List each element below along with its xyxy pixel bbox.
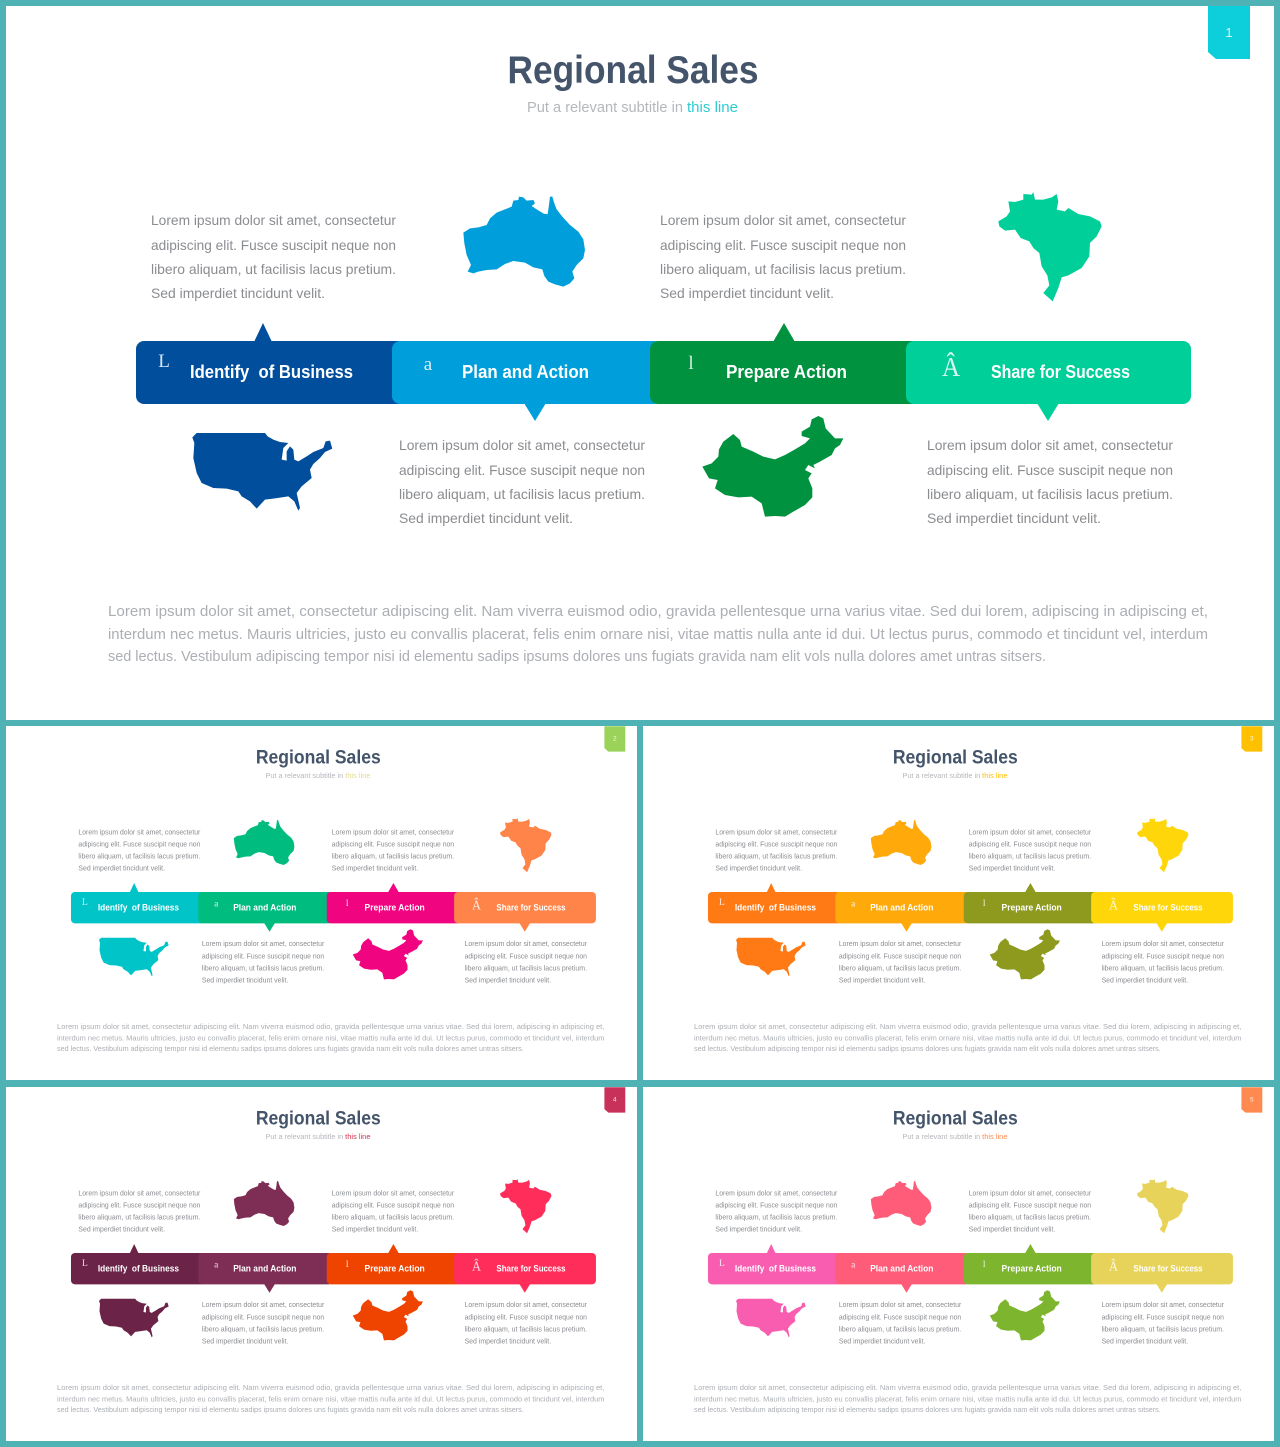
page tab 5 — [1241, 1087, 1262, 1113]
text block: bottom centre-left: libero aliquam, ut facilisis lacus pretium. — [202, 966, 324, 973]
text block: top centre: adipiscing elit. Fusce suscipit neque non — [660, 237, 906, 253]
text block: top left: Lorem ipsum dolor sit amet, consectetur — [78, 1190, 201, 1197]
text block: bottom right: Lorem ipsum dolor sit amet, consectetur — [465, 1302, 588, 1309]
text block: bottom right: adipiscing elit. Fusce suscipit neque non — [1102, 954, 1224, 961]
text block: top left — [715, 829, 838, 873]
map: China — [353, 929, 423, 979]
text block: bottom centre-left: Sed imperdiet tincidunt velit. — [839, 1339, 925, 1346]
step 2: Plan and Action: Plan and Action — [462, 361, 589, 382]
step 4: Share for Success: Â — [942, 352, 960, 382]
page tab 2: 2 — [613, 736, 617, 743]
step 3: Prepare Action: l — [346, 899, 349, 909]
step 4: Share for Success: Share for Success — [1133, 1263, 1203, 1273]
text block: top centre: adipiscing elit. Fusce suscipit neque non — [969, 842, 1091, 849]
paragraph: interdum nec metus. Mauris ultricies, justo eu convallis placerat, felis enim ornare nisi, vitae mattis nulla ante id dui. Ut lectus purus, commodo et tincidunt vel, interdum — [57, 1394, 604, 1403]
text block: bottom centre-left: Sed imperdiet tincidunt velit. — [839, 978, 925, 985]
step bar — [136, 323, 1191, 421]
text block: bottom right — [1102, 941, 1225, 985]
text block: bottom centre-left: adipiscing elit. Fusce suscipit neque non — [839, 1315, 961, 1322]
step 1: Identify of Business — [708, 883, 842, 923]
text block: top left: libero aliquam, ut facilisis lacus pretium. — [151, 261, 396, 277]
step 4: Share for Success: Share for Success — [496, 1263, 566, 1273]
step 3: Prepare Action — [650, 323, 920, 404]
text block: top centre — [332, 829, 455, 873]
text block: top left: Sed imperdiet tincidunt velit. — [151, 285, 325, 301]
paragraph: sed lectus. Vestibulum adipiscing tempor nisi id elementu sadips ipsums dolores uns fugiats gravida nam elit vols nulla dolores amet untras sitsers. — [57, 1405, 524, 1414]
text block: top centre: Lorem ipsum dolor sit amet, consectetur — [332, 829, 455, 836]
step 1: Identify of Business — [71, 883, 205, 923]
page tab 4 — [604, 1087, 625, 1113]
step 2: Plan and Action — [392, 341, 662, 421]
text block: bottom right: libero aliquam, ut facilisis lacus pretium. — [927, 486, 1173, 502]
step 2: Plan and Action: Plan and Action — [870, 902, 934, 912]
text block: top left — [78, 829, 201, 873]
text block: top left: Sed imperdiet tincidunt velit. — [78, 866, 165, 873]
text block: top centre: Sed imperdiet tincidunt velit. — [332, 866, 418, 873]
map: USA — [736, 1299, 806, 1337]
step 3: Prepare Action: Prepare Action — [726, 361, 847, 382]
page tab 4: 4 — [613, 1097, 617, 1104]
text block: top centre: Lorem ipsum dolor sit amet, consectetur — [660, 212, 906, 228]
text block: bottom centre-left — [202, 1302, 325, 1346]
text block: top centre: adipiscing elit. Fusce suscipit neque non — [332, 1203, 454, 1210]
step 4: Share for Success — [454, 1253, 596, 1293]
panel: slide 4 — [6, 1087, 637, 1441]
text block: bottom right — [927, 437, 1173, 526]
text block: bottom centre-left — [399, 437, 645, 526]
step 2: Plan and Action: Plan and Action — [233, 902, 297, 912]
text block: bottom right: libero aliquam, ut facilisis lacus pretium. — [1102, 966, 1224, 973]
text block: top centre — [969, 1190, 1092, 1234]
text block: bottom right: adipiscing elit. Fusce suscipit neque non — [465, 954, 587, 961]
map: China — [702, 416, 843, 517]
map: Brazil — [998, 192, 1102, 301]
text block: bottom right: Lorem ipsum dolor sit amet, consectetur — [1102, 941, 1225, 948]
paragraph: Lorem ipsum dolor sit amet, consectetur adipiscing elit. Nam viverra euismod odio, gravida pellentesque urna varius vitae. Sed dui lorem, adipiscing in adipiscing et, — [57, 1383, 604, 1392]
step 4: Share for Success: Share for Success — [1133, 902, 1203, 912]
text block: bottom right: Sed imperdiet tincidunt velit. — [1102, 978, 1188, 985]
step 1: Identify of Business: Identify of Business — [190, 361, 353, 382]
paragraph — [57, 1022, 604, 1053]
step 4: Share for Success: Â — [472, 897, 481, 912]
text block: bottom right: Sed imperdiet tincidunt velit. — [465, 978, 551, 985]
subtitle: this line — [982, 771, 1008, 780]
text block: bottom centre-left: Lorem ipsum dolor sit amet, consectetur — [839, 1302, 962, 1309]
step 3: Prepare Action: l — [983, 899, 986, 909]
paragraph — [694, 1383, 1241, 1414]
step 2: Plan and Action: Plan and Action — [233, 1263, 297, 1273]
text block: bottom centre-left: libero aliquam, ut facilisis lacus pretium. — [839, 1327, 961, 1334]
text block: top left — [78, 1190, 201, 1234]
text block: bottom right: Lorem ipsum dolor sit amet, consectetur — [927, 437, 1173, 453]
text block: bottom centre-left — [839, 941, 962, 985]
paragraph: interdum nec metus. Mauris ultricies, justo eu convallis placerat, felis enim ornare nisi, vitae mattis nulla ante id dui. Ut lectus purus, commodo et tincidunt vel, interdum — [108, 626, 1208, 643]
text block: bottom centre-left: Sed imperdiet tincidunt velit. — [202, 978, 288, 985]
text block: bottom centre-left: Lorem ipsum dolor sit amet, consectetur — [202, 1302, 325, 1309]
step 3: Prepare Action — [327, 883, 461, 923]
text block: bottom centre-left: Sed imperdiet tincidunt velit. — [202, 1339, 288, 1346]
step 2: Plan and Action: a — [851, 1260, 856, 1270]
map: Australia — [234, 1181, 294, 1226]
page tab 1: 1 — [1225, 25, 1233, 40]
map: Australia — [871, 820, 931, 865]
step 1: Identify of Business: L — [719, 1259, 725, 1269]
text block: top centre: Sed imperdiet tincidunt velit. — [969, 866, 1055, 873]
step 1: Identify of Business: L — [158, 351, 170, 372]
text block: bottom centre-left: Sed imperdiet tincidunt velit. — [399, 510, 573, 526]
text block: bottom centre-left: libero aliquam, ut facilisis lacus pretium. — [202, 1327, 324, 1334]
map: Australia — [463, 197, 585, 287]
step 4: Share for Success — [1091, 892, 1233, 932]
step bar — [71, 883, 596, 932]
text block: bottom right: Sed imperdiet tincidunt velit. — [465, 1339, 551, 1346]
text block: top centre: Lorem ipsum dolor sit amet, consectetur — [332, 1190, 455, 1197]
text block: bottom centre-left — [839, 1302, 962, 1346]
text block: top left: libero aliquam, ut facilisis lacus pretium. — [715, 1215, 837, 1222]
paragraph — [694, 1022, 1241, 1053]
step 2: Plan and Action: a — [214, 1260, 219, 1270]
text block: bottom centre-left: libero aliquam, ut facilisis lacus pretium. — [839, 966, 961, 973]
step 1: Identify of Business: L — [719, 898, 725, 908]
map: USA — [192, 433, 332, 511]
map: Brazil — [500, 818, 551, 872]
paragraph: sed lectus. Vestibulum adipiscing tempor nisi id elementu sadips ipsums dolores uns fugiats gravida nam elit vols nulla dolores amet untras sitsers. — [108, 648, 1046, 665]
paragraph: Lorem ipsum dolor sit amet, consectetur adipiscing elit. Nam viverra euismod odio, gravida pellentesque urna varius vitae. Sed dui lorem, adipiscing in adipiscing et, — [108, 603, 1208, 620]
page tab 3 — [1241, 726, 1262, 752]
map: Australia — [871, 1181, 931, 1226]
paragraph — [57, 1383, 604, 1414]
text block: bottom right: libero aliquam, ut facilisis lacus pretium. — [465, 966, 587, 973]
step 1: Identify of Business: Identify of Business — [735, 902, 816, 912]
paragraph: Lorem ipsum dolor sit amet, consectetur adipiscing elit. Nam viverra euismod odio, gravida pellentesque urna varius vitae. Sed dui lorem, adipiscing in adipiscing et, — [694, 1383, 1241, 1392]
map: Brazil — [500, 1179, 551, 1233]
step 4: Share for Success: Â — [472, 1258, 481, 1273]
title: Regional Sales — [256, 1108, 381, 1130]
map: China — [990, 1290, 1060, 1340]
step 4: Share for Success: Share for Success — [496, 902, 566, 912]
title: Regional Sales — [508, 49, 758, 92]
text block: top centre: Lorem ipsum dolor sit amet, consectetur — [969, 1190, 1092, 1197]
step bar — [71, 1244, 596, 1293]
step 3: Prepare Action: Prepare Action — [1002, 1263, 1062, 1273]
step 1: Identify of Business — [71, 1244, 205, 1284]
text block: top centre — [660, 212, 906, 301]
map: Brazil — [1137, 1179, 1188, 1233]
step 1: Identify of Business: L — [82, 1259, 88, 1269]
step 4: Share for Success: Â — [1109, 1258, 1118, 1273]
text block: top left: Lorem ipsum dolor sit amet, consectetur — [151, 212, 396, 228]
map: China — [353, 1290, 423, 1340]
text block: top centre: Lorem ipsum dolor sit amet, consectetur — [969, 829, 1092, 836]
text block: top left: Lorem ipsum dolor sit amet, consectetur — [78, 829, 201, 836]
text block: bottom right: Sed imperdiet tincidunt velit. — [1102, 1339, 1188, 1346]
text block: top centre — [332, 1190, 455, 1234]
subtitle: Put a relevant subtitle in — [266, 771, 343, 780]
step 1: Identify of Business: L — [82, 898, 88, 908]
text block: bottom right: adipiscing elit. Fusce suscipit neque non — [465, 1315, 587, 1322]
text block: top centre: libero aliquam, ut facilisis lacus pretium. — [969, 1215, 1091, 1222]
panel: slide 5 — [643, 1087, 1274, 1441]
step 1: Identify of Business — [136, 323, 406, 404]
step 3: Prepare Action: l — [346, 1260, 349, 1270]
step 2: Plan and Action: Plan and Action — [870, 1263, 934, 1273]
subtitle: Put a relevant subtitle in — [903, 771, 980, 780]
text block: bottom right: libero aliquam, ut facilisis lacus pretium. — [1102, 1327, 1224, 1334]
text block: bottom right — [1102, 1302, 1225, 1346]
text block: top left — [715, 1190, 838, 1234]
text block: bottom centre-left: adipiscing elit. Fusce suscipit neque non — [202, 954, 324, 961]
step 2: Plan and Action — [835, 1253, 970, 1293]
text block: top left: Sed imperdiet tincidunt velit. — [715, 866, 802, 873]
text block: top left: libero aliquam, ut facilisis lacus pretium. — [715, 854, 837, 861]
subtitle: Put a relevant subtitle in — [266, 1132, 343, 1141]
step 2: Plan and Action: a — [424, 354, 433, 375]
text block: top centre: Sed imperdiet tincidunt velit. — [969, 1227, 1055, 1234]
text block: top centre: libero aliquam, ut facilisis lacus pretium. — [660, 261, 906, 277]
subtitle: this line — [345, 771, 371, 780]
page tab 5: 5 — [1250, 1097, 1254, 1104]
text block: top left — [151, 212, 396, 301]
text block: top centre: adipiscing elit. Fusce suscipit neque non — [332, 842, 454, 849]
text block: top left: Sed imperdiet tincidunt velit. — [715, 1227, 802, 1234]
text block: bottom right: adipiscing elit. Fusce suscipit neque non — [1102, 1315, 1224, 1322]
paragraph: sed lectus. Vestibulum adipiscing tempor nisi id elementu sadips ipsums dolores uns fugiats gravida nam elit vols nulla dolores amet untras sitsers. — [694, 1405, 1161, 1414]
step 3: Prepare Action: Prepare Action — [365, 1263, 425, 1273]
step 4: Share for Success — [906, 341, 1191, 421]
text block: top centre: libero aliquam, ut facilisis lacus pretium. — [969, 854, 1091, 861]
text block: bottom centre-left: Lorem ipsum dolor sit amet, consectetur — [839, 941, 962, 948]
paragraph — [108, 603, 1208, 665]
step bar — [708, 883, 1233, 932]
text block: bottom centre-left — [202, 941, 325, 985]
paragraph: sed lectus. Vestibulum adipiscing tempor nisi id elementu sadips ipsums dolores uns fugiats gravida nam elit vols nulla dolores amet untras sitsers. — [694, 1044, 1161, 1053]
step 2: Plan and Action — [198, 1253, 333, 1293]
text block: bottom right: Lorem ipsum dolor sit amet, consectetur — [1102, 1302, 1225, 1309]
step 3: Prepare Action: l — [688, 353, 694, 374]
step 4: Share for Success: Share for Success — [991, 361, 1130, 382]
text block: bottom right — [465, 941, 588, 985]
map: USA — [99, 938, 169, 976]
step 4: Share for Success: Â — [1109, 897, 1118, 912]
text block: top centre: Sed imperdiet tincidunt velit. — [660, 285, 834, 301]
text block: top left: adipiscing elit. Fusce suscipit neque non — [151, 237, 396, 253]
text block: bottom centre-left: adipiscing elit. Fusce suscipit neque non — [839, 954, 961, 961]
title: Regional Sales — [256, 747, 381, 769]
step 1: Identify of Business: Identify of Business — [735, 1263, 816, 1273]
text block: top centre: libero aliquam, ut facilisis lacus pretium. — [332, 1215, 454, 1222]
step 2: Plan and Action: a — [851, 899, 856, 909]
text block: top left: Lorem ipsum dolor sit amet, consectetur — [715, 1190, 838, 1197]
map: Australia — [234, 820, 294, 865]
step 3: Prepare Action: l — [983, 1260, 986, 1270]
text block: bottom right: libero aliquam, ut facilisis lacus pretium. — [465, 1327, 587, 1334]
text block: bottom centre-left: libero aliquam, ut facilisis lacus pretium. — [399, 486, 645, 502]
text block: top centre: Sed imperdiet tincidunt velit. — [332, 1227, 418, 1234]
map: China — [990, 929, 1060, 979]
text block: top left: libero aliquam, ut facilisis lacus pretium. — [78, 854, 200, 861]
page tab 1 — [1208, 6, 1250, 59]
text block: top centre — [969, 829, 1092, 873]
paragraph: sed lectus. Vestibulum adipiscing tempor nisi id elementu sadips ipsums dolores uns fugiats gravida nam elit vols nulla dolores amet untras sitsers. — [57, 1044, 524, 1053]
step 2: Plan and Action — [198, 892, 333, 932]
text block: top centre: adipiscing elit. Fusce suscipit neque non — [969, 1203, 1091, 1210]
text block: bottom right: adipiscing elit. Fusce suscipit neque non — [927, 462, 1173, 478]
panel: slide 1 large — [6, 6, 1274, 720]
text block: top left: Sed imperdiet tincidunt velit. — [78, 1227, 165, 1234]
step 3: Prepare Action — [327, 1244, 461, 1284]
map: USA — [736, 938, 806, 976]
text block: top left: adipiscing elit. Fusce suscipit neque non — [715, 842, 837, 849]
text block: top left: libero aliquam, ut facilisis lacus pretium. — [78, 1215, 200, 1222]
paragraph: interdum nec metus. Mauris ultricies, justo eu convallis placerat, felis enim ornare nisi, vitae mattis nulla ante id dui. Ut lectus purus, commodo et tincidunt vel, interdum — [694, 1033, 1241, 1042]
page tab 3: 3 — [1250, 736, 1254, 743]
step 1: Identify of Business: Identify of Business — [98, 902, 179, 912]
step 3: Prepare Action — [964, 1244, 1098, 1284]
step 1: Identify of Business: Identify of Business — [98, 1263, 179, 1273]
step 3: Prepare Action: Prepare Action — [1002, 902, 1062, 912]
text block: bottom right: Sed imperdiet tincidunt velit. — [927, 510, 1101, 526]
subtitle: this line — [982, 1132, 1008, 1141]
title: Regional Sales — [893, 747, 1018, 769]
text block: top left: adipiscing elit. Fusce suscipit neque non — [78, 842, 200, 849]
panel: slide 3 — [643, 726, 1274, 1080]
panel: slide 2 — [6, 726, 637, 1080]
step 3: Prepare Action: Prepare Action — [365, 902, 425, 912]
text block: bottom right — [465, 1302, 588, 1346]
text block: top left: adipiscing elit. Fusce suscipit neque non — [715, 1203, 837, 1210]
step 4: Share for Success — [1091, 1253, 1233, 1293]
paragraph: interdum nec metus. Mauris ultricies, justo eu convallis placerat, felis enim ornare nisi, vitae mattis nulla ante id dui. Ut lectus purus, commodo et tincidunt vel, interdum — [694, 1394, 1241, 1403]
text block: top left: Lorem ipsum dolor sit amet, consectetur — [715, 829, 838, 836]
map: Brazil — [1137, 818, 1188, 872]
text block: bottom centre-left: Lorem ipsum dolor sit amet, consectetur — [202, 941, 325, 948]
step 4: Share for Success — [454, 892, 596, 932]
step 2: Plan and Action: a — [214, 899, 219, 909]
text block: bottom centre-left: Lorem ipsum dolor sit amet, consectetur — [399, 437, 645, 453]
step 2: Plan and Action — [835, 892, 970, 932]
page tab 2 — [604, 726, 625, 752]
subtitle: this line — [345, 1132, 371, 1141]
subtitle: Put a relevant subtitle in — [903, 1132, 980, 1141]
paragraph: Lorem ipsum dolor sit amet, consectetur adipiscing elit. Nam viverra euismod odio, gravida pellentesque urna varius vitae. Sed dui lorem, adipiscing in adipiscing et, — [694, 1022, 1241, 1031]
map: USA — [99, 1299, 169, 1337]
step bar — [708, 1244, 1233, 1293]
paragraph: interdum nec metus. Mauris ultricies, justo eu convallis placerat, felis enim ornare nisi, vitae mattis nulla ante id dui. Ut lectus purus, commodo et tincidunt vel, interdum — [57, 1033, 604, 1042]
text block: bottom centre-left: adipiscing elit. Fusce suscipit neque non — [399, 462, 645, 478]
text block: top left: adipiscing elit. Fusce suscipit neque non — [78, 1203, 200, 1210]
title: Regional Sales — [893, 1108, 1018, 1130]
paragraph: Lorem ipsum dolor sit amet, consectetur adipiscing elit. Nam viverra euismod odio, gravida pellentesque urna varius vitae. Sed dui lorem, adipiscing in adipiscing et, — [57, 1022, 604, 1031]
step 3: Prepare Action — [964, 883, 1098, 923]
subtitle: this line — [687, 100, 738, 116]
text block: top centre: libero aliquam, ut facilisis lacus pretium. — [332, 854, 454, 861]
text block: bottom centre-left: adipiscing elit. Fusce suscipit neque non — [202, 1315, 324, 1322]
text block: bottom right: Lorem ipsum dolor sit amet, consectetur — [465, 941, 588, 948]
step 1: Identify of Business — [708, 1244, 842, 1284]
subtitle: Put a relevant subtitle in — [527, 100, 683, 116]
